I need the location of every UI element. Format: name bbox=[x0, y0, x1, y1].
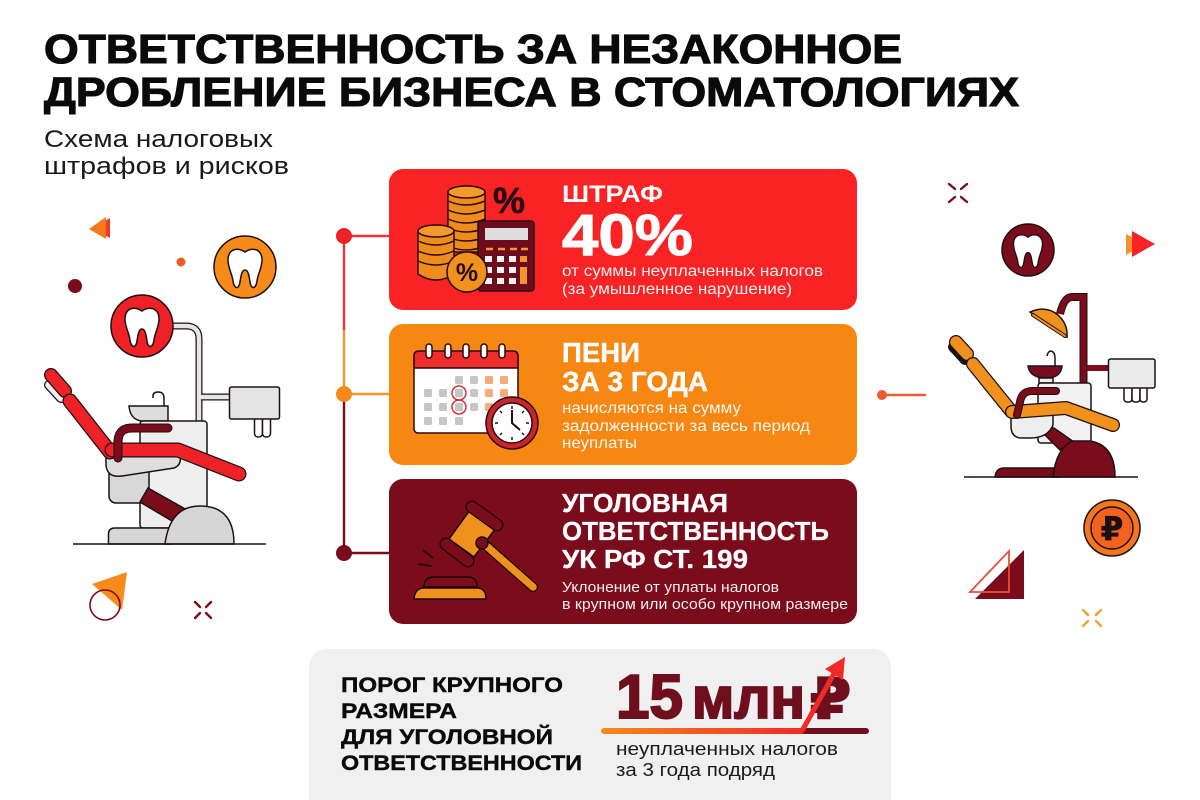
tray bbox=[1087, 359, 1155, 402]
connector stub bbox=[877, 390, 926, 400]
text: criminal liability: в крупном или особо крупном размере bbox=[562, 596, 848, 613]
sink bbox=[129, 392, 168, 421]
coin with percent: % bbox=[456, 259, 478, 287]
threshold caption: неуплаченных налогов bbox=[616, 739, 838, 759]
icon: gavel bbox=[414, 507, 533, 599]
handle bbox=[482, 542, 533, 587]
text: fine bbox=[562, 181, 823, 298]
threshold heading: ОТВЕТСТВЕННОСТИ bbox=[341, 752, 582, 775]
triangle and circle bbox=[90, 572, 127, 620]
panel: penalties bbox=[389, 324, 857, 465]
bottom cap bbox=[446, 544, 468, 561]
threshold amount: 15 bbox=[616, 663, 683, 732]
tall coin stack bbox=[448, 186, 485, 252]
armrest bbox=[1017, 391, 1056, 415]
triangles bbox=[970, 550, 1024, 599]
right dental chair illustration bbox=[953, 224, 1155, 477]
red node bbox=[336, 228, 352, 244]
clock bbox=[486, 397, 538, 449]
column bbox=[1038, 383, 1091, 443]
text: fine: от суммы неуплаченных налогов bbox=[562, 263, 823, 280]
orange node bbox=[336, 386, 352, 402]
text: criminal liability: Уклонение от уплаты налогов bbox=[562, 579, 779, 596]
column bbox=[140, 421, 207, 528]
subtitle: штрафов и рисков bbox=[44, 153, 289, 180]
threshold caption: за 3 года подряд bbox=[616, 760, 776, 780]
threshold heading: РАЗМЕРА bbox=[341, 700, 457, 723]
calculator bbox=[478, 221, 534, 291]
threshold caption bbox=[616, 739, 838, 780]
decorative shapes right bbox=[877, 184, 1155, 626]
arrow: red double bbox=[1126, 231, 1155, 257]
text: penalties: начисляются на сумму bbox=[562, 400, 741, 417]
arrow: orange double bbox=[89, 217, 110, 239]
lower block bbox=[109, 465, 149, 503]
panel: threshold bbox=[309, 649, 891, 800]
title: ДРОБЛЕНИЕ БИЗНЕСА В СТОМАТОЛОГИЯХ bbox=[44, 69, 1019, 115]
panel: fine 40% bbox=[389, 169, 857, 310]
sparkle bbox=[195, 602, 211, 618]
threshold heading: ПОРОГ КРУПНОГО bbox=[341, 674, 563, 697]
threshold heading: ДЛЯ УГОЛОВНОЙ bbox=[341, 725, 553, 749]
seat cushion bbox=[106, 455, 180, 476]
title bbox=[44, 26, 1019, 115]
text: fine: ШТРАФ bbox=[562, 181, 663, 208]
gradient baseline bbox=[601, 728, 869, 734]
head bbox=[449, 510, 496, 557]
sink bbox=[1028, 351, 1062, 383]
title: ОТВЕТСТВЕННОСТЬ ЗА НЕЗАКОННОЕ bbox=[44, 26, 902, 72]
text: penalties: ЗА 3 ГОДА bbox=[562, 366, 708, 397]
text: penalties: ПЕНИ bbox=[562, 337, 640, 368]
percent sign: % bbox=[493, 180, 525, 221]
dome bbox=[165, 506, 234, 544]
lamp arm bbox=[1060, 297, 1084, 384]
icon: calendar and clock bbox=[414, 344, 538, 449]
headrest bbox=[953, 342, 967, 360]
backrest bbox=[70, 401, 110, 452]
connector tree bbox=[336, 228, 389, 561]
threshold amount: ₽ bbox=[810, 667, 851, 730]
icon: ruble coin: ₽ bbox=[1101, 510, 1123, 547]
headrest bbox=[49, 375, 65, 398]
subtitle: Схема налоговых bbox=[44, 126, 273, 153]
calendar bbox=[414, 344, 518, 433]
icon: ruble coin bbox=[1084, 500, 1140, 556]
lamp arm bbox=[173, 326, 199, 421]
lamp bbox=[1030, 309, 1067, 337]
hub bbox=[476, 537, 488, 549]
top cap bbox=[472, 507, 497, 525]
orange dot bbox=[176, 258, 186, 266]
lift arm bbox=[1040, 428, 1074, 450]
lift arm bbox=[140, 488, 187, 521]
base bbox=[995, 468, 1060, 477]
icon: orange tooth badge bbox=[214, 236, 276, 298]
subtitle bbox=[44, 126, 289, 180]
left dental chair illustration bbox=[49, 236, 280, 544]
text: criminal liability: УК РФ СТ. 199 bbox=[562, 544, 748, 574]
threshold amount: млн bbox=[692, 666, 805, 731]
dark dot bbox=[68, 279, 82, 293]
instrument tray bbox=[201, 387, 280, 437]
text: criminal liability: УГОЛОВНАЯ bbox=[562, 488, 728, 518]
sparkle dark bbox=[949, 184, 967, 202]
text: criminal liability bbox=[562, 488, 848, 613]
floor bbox=[964, 476, 1138, 478]
icon: dark tooth badge bbox=[1002, 224, 1054, 276]
icon: coins and calculator bbox=[418, 180, 534, 292]
threshold amount bbox=[616, 663, 851, 732]
text: penalties bbox=[562, 337, 810, 452]
text: penalties: неуплаты bbox=[562, 435, 637, 452]
impact lines bbox=[418, 550, 433, 566]
text: fine: (за умышленное нарушение) bbox=[562, 281, 792, 298]
threshold heading bbox=[341, 674, 582, 775]
short coin stack bbox=[418, 225, 454, 280]
icon: red tooth badge bbox=[111, 295, 173, 357]
seat cushion bbox=[1011, 414, 1053, 438]
block bbox=[424, 577, 477, 587]
sparkle orange bbox=[1083, 610, 1101, 626]
base bbox=[108, 528, 172, 544]
decorative shapes left bbox=[68, 217, 211, 620]
dome bbox=[1053, 441, 1115, 477]
seat bbox=[1012, 408, 1113, 425]
text: fine: 40% bbox=[562, 203, 693, 268]
floor bbox=[73, 543, 266, 545]
arrow: rising bbox=[802, 657, 845, 731]
text: penalties: задолженности за весь период bbox=[562, 418, 810, 435]
text: criminal liability: ОТВЕТСТВЕННОСТЬ bbox=[562, 516, 829, 546]
backrest bbox=[973, 364, 1011, 411]
panel: criminal liability bbox=[389, 479, 857, 624]
seat bbox=[112, 450, 239, 474]
armrest bbox=[118, 428, 168, 458]
dark node bbox=[336, 545, 352, 561]
